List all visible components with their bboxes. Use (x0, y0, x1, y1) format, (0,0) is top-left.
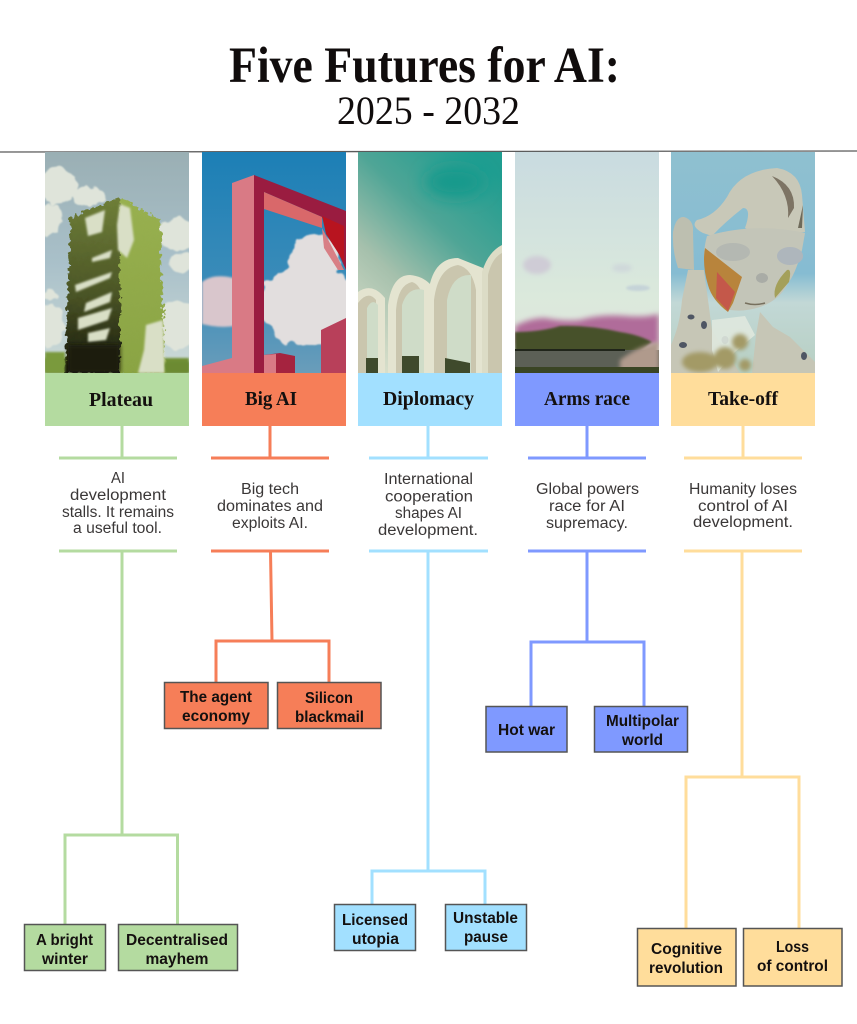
label: Diplomacy: Diplomacy (383, 388, 474, 410)
column: Take-off (638, 152, 842, 986)
description: Arms race (536, 481, 639, 532)
description: Plateau: development (70, 487, 167, 504)
description: Take-off: control of AI (698, 498, 788, 515)
scenario: Licensed utopia: utopia (352, 931, 399, 948)
label: Arms race (515, 373, 659, 426)
scenario: Unstable pause: Unstable (453, 910, 518, 927)
label: Big AI: Big AI (245, 388, 297, 410)
scenario: Hot war (486, 706, 567, 752)
label: Take-off: Take-off (708, 388, 778, 410)
label: Diplomacy (358, 373, 502, 426)
scenario: Unstable pause: pause (464, 929, 508, 946)
scenario: Silicon blackmail: blackmail (295, 709, 364, 726)
scenario: A bright winter (24, 924, 106, 970)
scenario: Decentralised mayhem: Decentralised (126, 932, 228, 949)
cheek inlay (704, 248, 742, 312)
scenario: Hot war: Hot war (498, 722, 555, 739)
scenario: Multipolar world: world (621, 732, 663, 749)
description: Big AI: exploits AI. (232, 515, 308, 532)
scenario: Licensed utopia: Licensed (342, 912, 408, 929)
description: Diplomacy: International (384, 471, 473, 488)
connector: Plateau stem (59, 426, 178, 924)
description: Arms race: supremacy. (546, 515, 628, 532)
label: Plateau (45, 373, 189, 426)
scenario: Cognitive revolution: Cognitive (651, 941, 722, 958)
subtitle: date range: 2025 - 2032 (337, 88, 520, 133)
description: Plateau: AI (111, 470, 125, 487)
scenario: Multipolar world (594, 706, 688, 752)
scenario: Silicon blackmail: Silicon (305, 690, 353, 707)
scenario: Unstable pause (446, 904, 526, 950)
description: Diplomacy (378, 471, 478, 539)
connector: Arms race stem (528, 426, 646, 706)
description: Plateau: a useful tool. (73, 520, 162, 537)
description: Plateau: stalls. It remains (62, 504, 174, 521)
scenario: Cognitive revolution: revolution (649, 960, 723, 977)
description: Diplomacy: shapes AI (395, 505, 462, 522)
scenario: A bright winter: winter (41, 951, 88, 968)
connector: Big AI stem (211, 426, 329, 682)
connector: Take-off stem (684, 426, 802, 928)
scenario: Loss of control: Loss (776, 939, 809, 956)
statue body (671, 270, 815, 373)
description: Big AI: dominates and (217, 498, 323, 515)
label: Plateau: Plateau (89, 389, 153, 411)
column: Plateau (24, 152, 238, 970)
label: Big AI (202, 373, 346, 426)
scenario: Loss of control (744, 928, 842, 986)
title: Five Futures for AI: (229, 38, 620, 94)
label: Arms race: Arms race (544, 388, 630, 410)
description: Take-off: development. (693, 514, 793, 531)
description: Diplomacy: development. (378, 522, 478, 539)
scenario: Loss of control: of control (757, 958, 828, 975)
scenario: Decentralised mayhem: mayhem (146, 951, 208, 968)
description: Take-off: Humanity loses (689, 481, 797, 498)
label: Take-off (671, 373, 815, 426)
description: Take-off (689, 481, 797, 531)
description: Plateau (62, 470, 174, 537)
image: red frame and clouds (202, 152, 356, 373)
image: white arches (358, 152, 502, 373)
description: Diplomacy: cooperation (385, 488, 473, 506)
column: Arms race (486, 152, 688, 752)
description: Arms race: race for AI (549, 498, 625, 515)
image: sculpted figure (671, 152, 815, 373)
scenario: The agent economy (164, 682, 268, 728)
description: Arms race: Global powers (536, 481, 639, 498)
description: Big AI (217, 481, 323, 532)
image: misty landscape (515, 152, 659, 373)
column: Big AI (164, 152, 381, 728)
connector: Diplomacy stem (369, 426, 488, 904)
scenario: The agent economy: The agent (180, 689, 252, 706)
column: Diplomacy (334, 152, 526, 950)
scenario: Cognitive revolution (638, 928, 736, 986)
description: Big AI: Big tech (241, 481, 299, 498)
scenario: The agent economy: economy (182, 708, 250, 725)
image: overgrown tower (45, 152, 189, 373)
scenario: A bright winter: A bright (36, 932, 93, 949)
scenario: Decentralised mayhem (118, 924, 238, 970)
scenario: Multipolar world: Multipolar (606, 713, 679, 730)
scenario: Silicon blackmail (278, 682, 381, 728)
scenario: Licensed utopia (334, 904, 416, 950)
